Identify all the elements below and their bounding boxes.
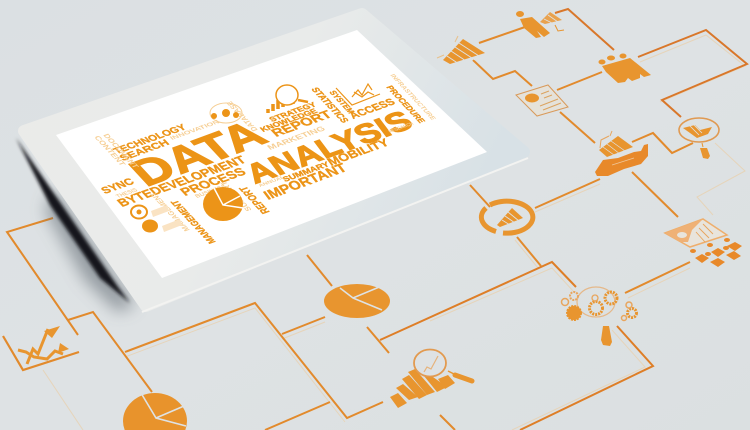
icon: hand holding chart xyxy=(595,131,648,176)
word cloud: SYNC xyxy=(99,177,137,196)
icon: funnel chart xyxy=(437,36,485,64)
icon: magnifier bar chart xyxy=(390,350,472,408)
tablet shadow xyxy=(16,138,135,312)
pale words: DATABASE xyxy=(224,100,260,132)
icon: dashboard with hexagons xyxy=(665,219,742,267)
icon: target bar chart xyxy=(481,201,533,233)
tablet bottom edge highlight xyxy=(142,158,528,312)
word cloud magnifier bars icon xyxy=(268,85,308,113)
word cloud: TECHNOLOGY xyxy=(112,123,189,156)
word cloud: KNOWLEDGE xyxy=(258,107,320,133)
word cloud: MANAGEMENT xyxy=(169,199,218,245)
icon: report document xyxy=(516,85,568,116)
pale words: MARKETING xyxy=(265,125,327,151)
word cloud: REPORT xyxy=(237,184,273,215)
pale words: DOCUMENT xyxy=(101,133,142,170)
icon: magnifier with chart xyxy=(679,118,719,159)
word cloud: SYSTEM xyxy=(327,90,356,115)
icon: gears magnifier xyxy=(562,287,636,346)
word cloud target and bars icons xyxy=(131,205,182,232)
word cloud: ANALYSIS xyxy=(239,105,419,189)
word cloud: PROCEDURE xyxy=(384,85,427,125)
pale words: INFRASTRUCTURE xyxy=(388,73,437,121)
pale words: RESEARCH xyxy=(387,121,416,134)
pale words: THESIS xyxy=(115,187,139,199)
word cloud: BYTEDEVELOPMENT xyxy=(114,153,250,209)
tablet xyxy=(24,14,528,312)
pale words: BUSINESS xyxy=(194,184,228,199)
word cloud gears icon xyxy=(210,103,242,123)
word cloud: IMPORTANT xyxy=(261,161,350,203)
word cloud: REPORT xyxy=(268,108,336,139)
word cloud pie icon xyxy=(203,187,243,221)
icon: pie chart lower xyxy=(123,393,187,430)
word cloud: SEARCH xyxy=(118,138,172,163)
word cloud: SUMMARY xyxy=(281,160,332,184)
word cloud: MOBILITY xyxy=(325,136,392,168)
icon: pie chart upper xyxy=(324,284,390,318)
word cloud: PROCESS xyxy=(177,165,249,198)
pale words: MANAGEMENT xyxy=(147,191,192,232)
icon: presenter with chart xyxy=(516,11,564,38)
pale words: ANNUAL xyxy=(257,175,286,188)
word cloud: STRATEGY xyxy=(267,101,319,123)
pale words: INNOVATION xyxy=(169,119,222,141)
pale words: CONTENT xyxy=(92,135,128,167)
tablet body xyxy=(24,14,524,306)
word cloud xyxy=(99,85,427,245)
word cloud: ACCESS xyxy=(347,97,398,121)
pale words xyxy=(92,73,437,232)
word cloud trend chart icon xyxy=(336,84,380,105)
word cloud: DATA xyxy=(120,114,277,194)
pale words: SUPPORT xyxy=(218,180,254,212)
tablet screen xyxy=(56,30,487,278)
icon: people group xyxy=(598,54,651,83)
word cloud: STATISTICS xyxy=(309,86,351,124)
icon: trend arrows chart xyxy=(3,326,79,370)
